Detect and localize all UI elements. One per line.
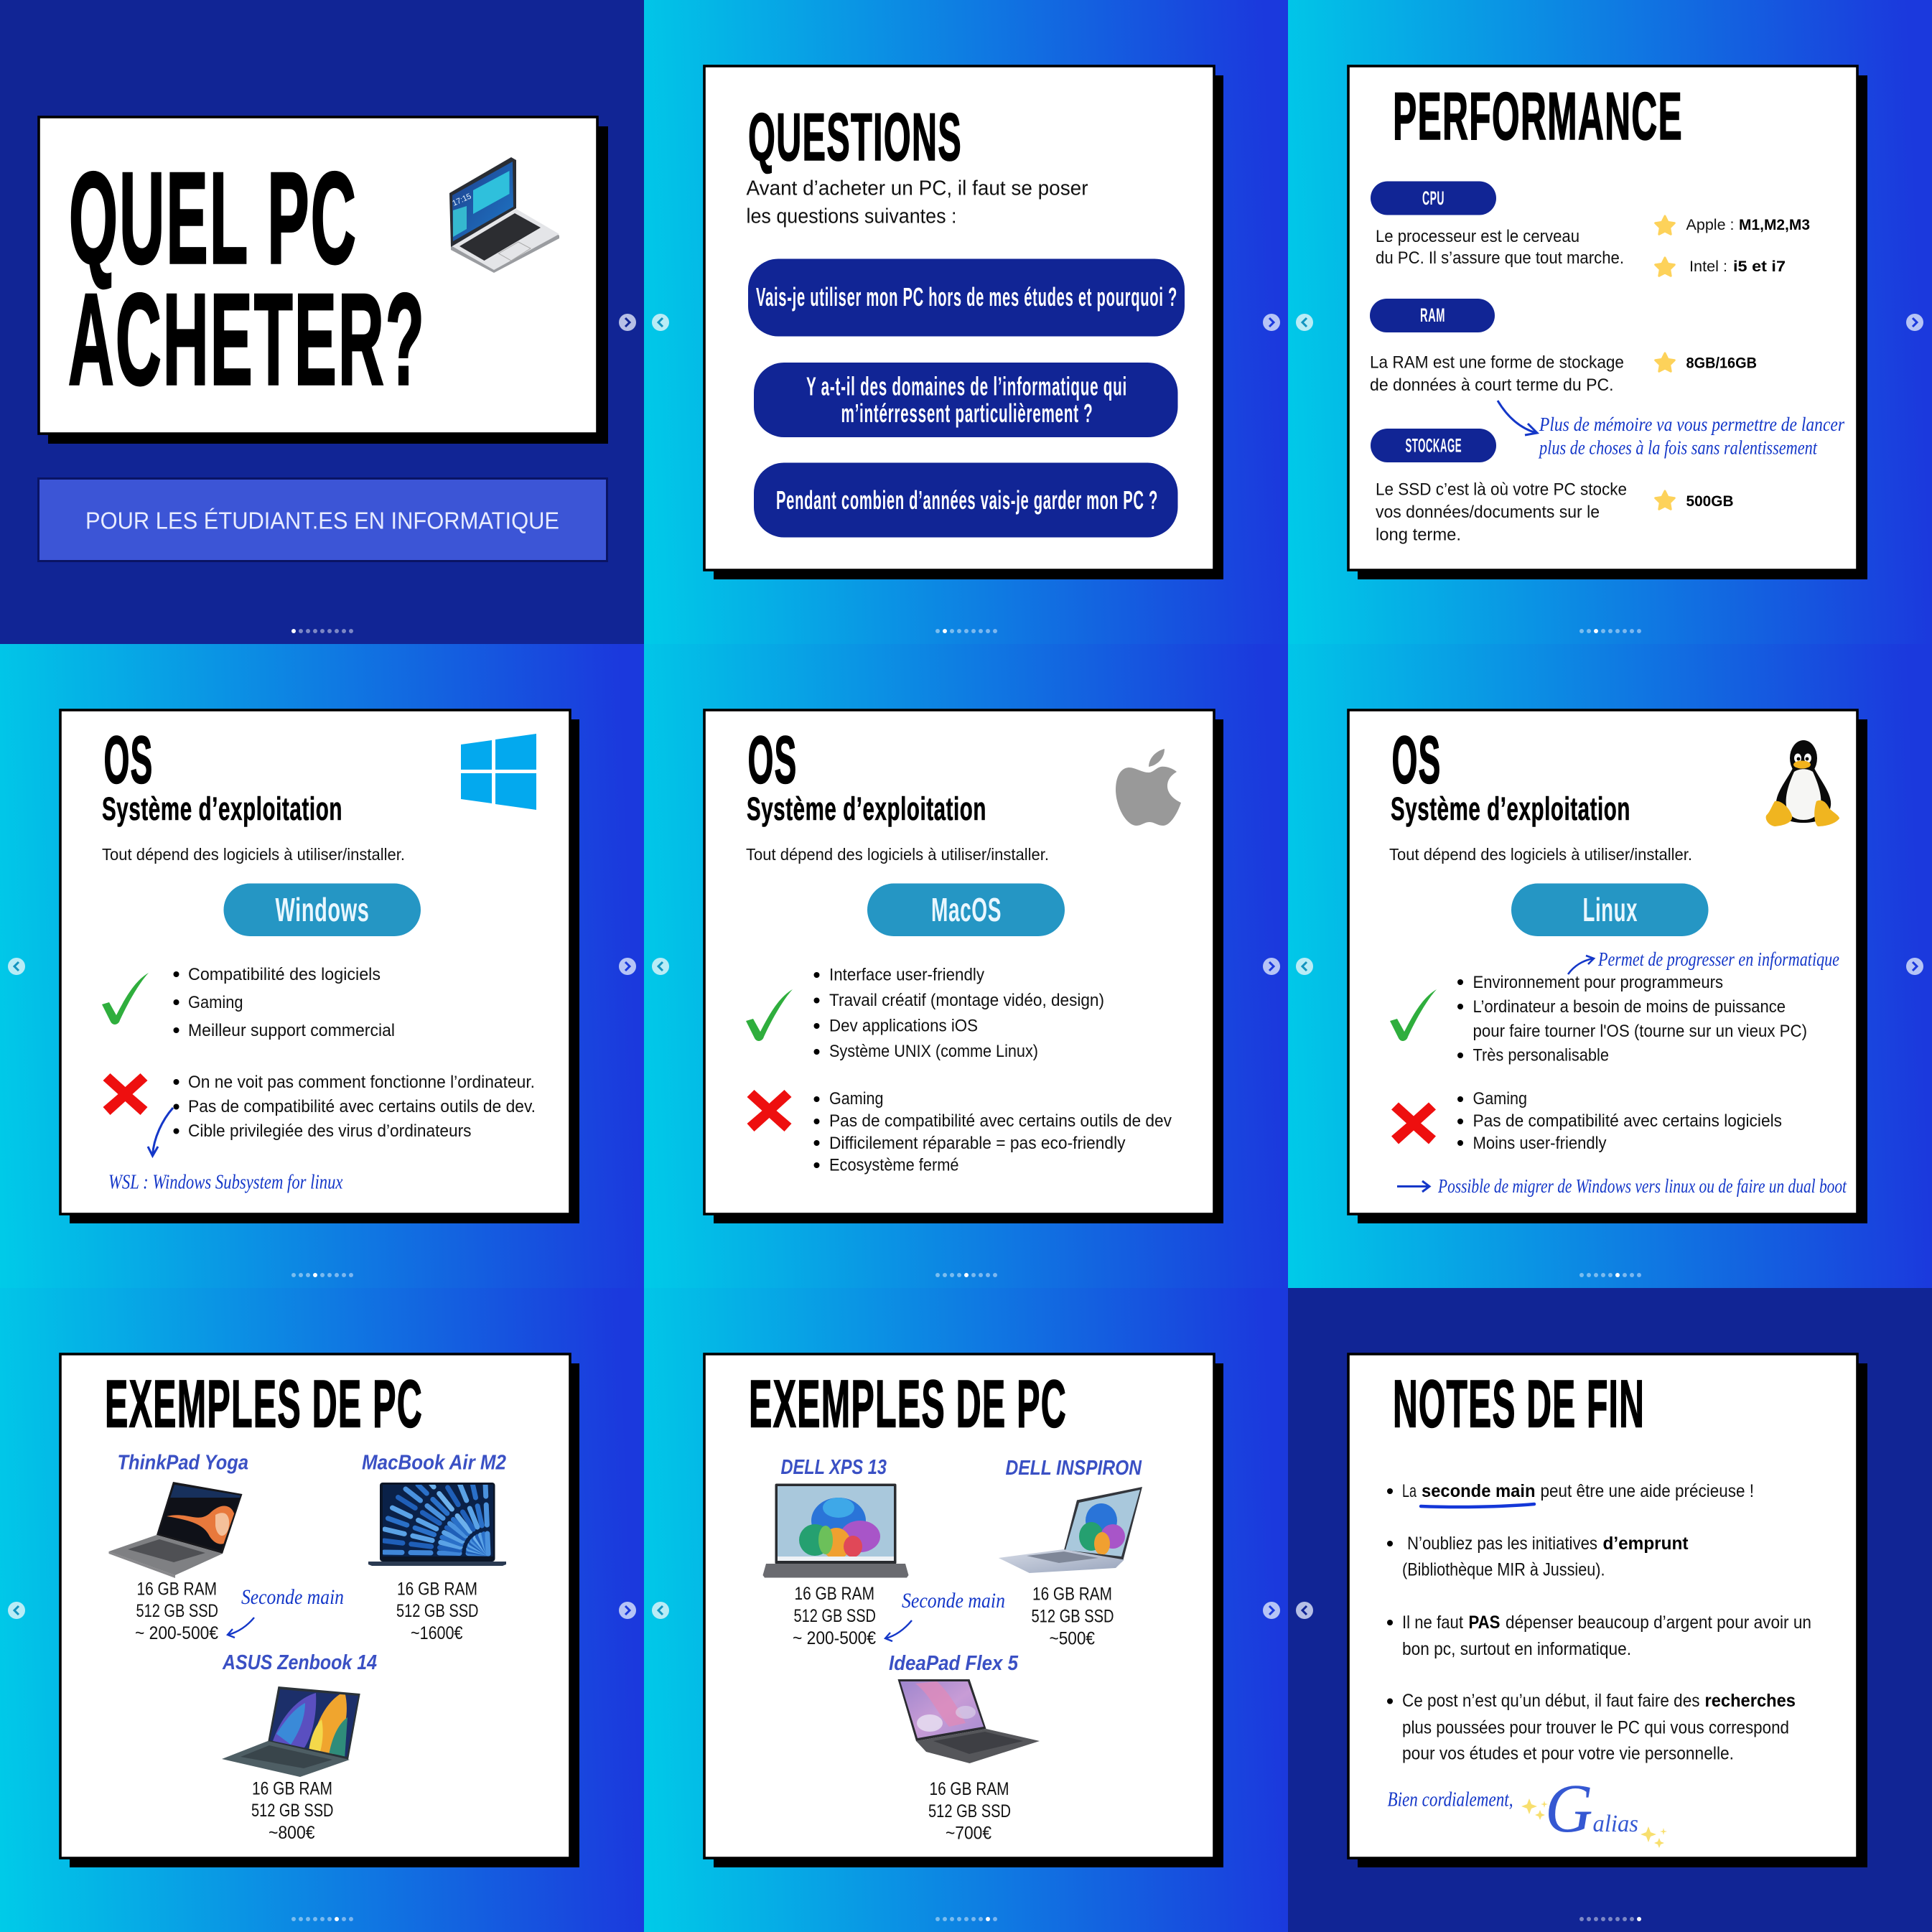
intro line 1: Avant d’acheter un PC, il faut se poser — [747, 177, 1088, 200]
drawbacks list — [174, 1073, 536, 1141]
icon: star — [1656, 353, 1674, 371]
memory note line 2: plus de choses à la fois sans ralentissement — [1538, 437, 1818, 458]
icon: star — [1656, 258, 1674, 276]
card — [704, 710, 1214, 1214]
icon: red cross — [747, 1090, 791, 1131]
note 4 — [1387, 1691, 1796, 1763]
laptop: MacBook — [368, 1483, 506, 1566]
arrow to price — [885, 1620, 912, 1641]
previous arrow — [1296, 314, 1313, 331]
panel: questions — [644, 0, 1288, 644]
note 1: seconde main — [1422, 1481, 1535, 1501]
active dot — [335, 1917, 339, 1921]
previous arrow — [8, 1602, 25, 1619]
specs: ThinkPad — [135, 1579, 218, 1643]
advantages list: pour faire tourner l'OS (tourne sur un vieux PC) — [1473, 1022, 1807, 1041]
next arrow — [1263, 958, 1280, 975]
panel: OS Windows — [0, 644, 644, 1288]
pagination dots — [1579, 1917, 1634, 1921]
card — [1348, 66, 1857, 570]
drawbacks list: Gaming — [1473, 1089, 1527, 1109]
panel: OS MacOS — [644, 644, 1288, 1288]
intro line 2: les questions suivantes : — [747, 205, 956, 228]
next arrow — [1906, 958, 1923, 975]
note 3 — [1387, 1613, 1811, 1659]
specs: MacBook: 512 GB SSD — [396, 1601, 478, 1621]
card shadow — [714, 75, 1223, 579]
model name: ASUS Zenbook 14: ASUS Zenbook 14 — [222, 1651, 377, 1674]
question pill 2 — [754, 363, 1177, 437]
drawbacks list: Pas de compatibilité avec certains outils de dev — [829, 1111, 1172, 1131]
advantages list — [814, 965, 1104, 1061]
advantages list — [174, 965, 395, 1040]
previous arrow — [652, 958, 669, 975]
CPU label: CPU — [1422, 187, 1445, 209]
pagination dots — [1579, 1273, 1641, 1277]
RAM value: 8GB/16GB — [1686, 355, 1757, 372]
active dot — [1637, 1917, 1641, 1921]
active dot — [1615, 1273, 1620, 1277]
panel: OS MacOS: OS — [748, 722, 797, 797]
pagination dots — [291, 1273, 353, 1277]
advantages list: L’ordinateur a besoin de moins de puissance — [1473, 997, 1786, 1017]
drawbacks list — [1457, 1089, 1782, 1153]
specs: DELL XPS: ~ 200-500€ — [793, 1628, 876, 1648]
icon: star — [1656, 216, 1674, 234]
question pill 1 — [748, 258, 1185, 336]
advantages list: Travail créatif (montage vidéo, design) — [829, 991, 1104, 1010]
specs: IdeaPad — [928, 1779, 1011, 1844]
specs: MacBook: ~1600€ — [411, 1623, 463, 1643]
advantages list: Interface user-friendly — [829, 965, 984, 985]
specs: ASUS: ~800€ — [269, 1823, 315, 1843]
closing note: Bien cordialement, — [1387, 1789, 1513, 1811]
drawbacks list: Moins user-friendly — [1473, 1134, 1607, 1153]
note 2: N’oubliez pas les initiatives — [1407, 1534, 1597, 1554]
model name: MacBook Air M2: MacBook Air M2 — [362, 1452, 506, 1475]
heading: PERFORMANCE — [1393, 78, 1683, 154]
subheading: Système d’exploitation — [747, 790, 986, 827]
card — [1348, 710, 1857, 1214]
RAM label: RAM — [1420, 304, 1445, 326]
card — [704, 1354, 1214, 1858]
question 1 text: Vais-je utiliser mon PC hors de mes études et pourquoi ? — [756, 282, 1177, 312]
note 2: d’emprunt — [1602, 1534, 1689, 1554]
previous arrow — [1296, 958, 1313, 975]
model name: DELL INSPIRON: DELL INSPIRON — [1005, 1457, 1142, 1480]
OS name: Linux — [1582, 891, 1638, 928]
previous arrow — [8, 958, 25, 975]
active dot — [964, 1273, 969, 1277]
previous arrow — [1296, 1602, 1313, 1619]
question 2 text line 2: m’intérressent particulièrement ? — [841, 398, 1093, 428]
next arrow — [1263, 1602, 1280, 1619]
specs: MacBook: 16 GB RAM — [397, 1579, 477, 1600]
SSD text line 1: Le SSD c’est là où votre PC stocke — [1376, 480, 1627, 500]
card shadow — [70, 719, 579, 1223]
advantages list: Dev applications iOS — [829, 1017, 978, 1035]
card shadow — [70, 1363, 579, 1867]
question pill 3 — [754, 462, 1177, 537]
heading: EXEMPLES DE PC — [105, 1366, 423, 1442]
previous arrow — [652, 1602, 669, 1619]
pagination dots — [291, 1917, 353, 1921]
panel: PC examples 1 — [0, 1288, 644, 1932]
pagination dots — [1579, 629, 1641, 633]
memory note line 1: Plus de mémoire va vous permettre de lancer — [1539, 414, 1844, 435]
SSD text line 3: long terme. — [1376, 526, 1461, 544]
note 4: recherches — [1704, 1691, 1796, 1711]
Apple label: Apple : — [1686, 217, 1735, 233]
specs: DELL XPS — [793, 1584, 876, 1648]
OS pill — [1511, 883, 1709, 936]
icon: Tux penguin — [1766, 740, 1839, 826]
advantages list: Système UNIX (comme Linux) — [829, 1042, 1038, 1061]
drawbacks list: Pas de compatibilité avec certains logiciels — [1473, 1111, 1782, 1131]
specs: ThinkPad: ~ 200-500€ — [135, 1623, 218, 1643]
arrow to note — [1568, 956, 1594, 974]
icon: Windows logo — [461, 734, 536, 810]
card shadow — [48, 126, 608, 444]
Intel label: Intel : — [1689, 258, 1727, 275]
arrow to price — [228, 1618, 254, 1638]
laptop: DELL XPS — [762, 1483, 909, 1578]
WSL note: WSL : Windows Subsystem for linux — [108, 1172, 343, 1193]
underline stroke — [1421, 1504, 1534, 1507]
intro text: Tout dépend des logiciels à utiliser/installer. — [1389, 845, 1692, 864]
RAM pill — [1370, 299, 1495, 332]
drawbacks list: Gaming — [829, 1089, 883, 1109]
icon: check mark — [1390, 989, 1437, 1041]
drawbacks list: Ecosystème fermé — [829, 1156, 959, 1175]
specs: DELL XPS: 16 GB RAM — [794, 1584, 874, 1604]
specs: MacBook — [396, 1579, 478, 1643]
SSD text line 2: vos données/documents sur le — [1376, 503, 1600, 522]
drawbacks list: Cible privilegiée des virus d’ordinateurs — [188, 1121, 471, 1141]
advantages list: Compatibilité des logiciels — [188, 965, 381, 984]
card shadow — [1358, 1363, 1867, 1867]
arrow to migration note — [1397, 1181, 1429, 1192]
signature: Galias — [1545, 1770, 1638, 1847]
note 2 — [1387, 1534, 1689, 1579]
icon: check mark — [746, 989, 793, 1041]
advantages list: Meilleur support commercial — [188, 1021, 395, 1040]
active dot — [986, 1917, 990, 1921]
icon: check mark — [102, 973, 149, 1025]
card shadow — [1358, 719, 1867, 1223]
OS pill — [224, 883, 421, 936]
next arrow — [1906, 314, 1923, 331]
note 1: La — [1402, 1481, 1417, 1501]
note: progress: Permet de progresser en informatique — [1597, 948, 1839, 970]
specs: ASUS — [251, 1779, 333, 1843]
CPU text line 2: du PC. Il s’assure que tout marche. — [1376, 248, 1624, 268]
note 3: Il ne faut — [1402, 1613, 1463, 1633]
panel: performance — [1288, 0, 1932, 644]
SSD value: 500GB — [1686, 493, 1733, 510]
advantages list: Environnement pour programmeurs — [1473, 973, 1723, 992]
specs: ASUS: 512 GB SSD — [251, 1801, 333, 1821]
panel: OS Windows: OS — [103, 722, 154, 797]
subtitle text: POUR LES ÉTUDIANT.ES EN INFORMATIQUE — [85, 507, 559, 534]
note 4: plus poussées pour trouver le PC qui vous correspond — [1402, 1717, 1789, 1737]
heading: QUESTIONS — [748, 99, 962, 174]
specs: DELL Inspiron: ~500€ — [1050, 1628, 1095, 1648]
note 4: Ce post n’est qu’un début, il faut faire des — [1402, 1691, 1700, 1711]
OS name: Windows — [276, 891, 369, 928]
next arrow — [619, 314, 636, 331]
Intel chips: i5 et i7 — [1733, 258, 1786, 275]
RAM text line 1: La RAM est une forme de stockage — [1370, 353, 1624, 372]
note 1: peut être une aide précieuse ! — [1541, 1481, 1754, 1501]
note 3: dépenser beaucoup d’argent pour avoir un — [1506, 1613, 1811, 1633]
panel: title slide — [0, 0, 644, 644]
note 3: PAS — [1469, 1613, 1501, 1633]
panel: title slide: ACHETER? — [68, 267, 426, 412]
specs: IdeaPad: 512 GB SSD — [928, 1801, 1011, 1821]
model name: ThinkPad Yoga: ThinkPad Yoga — [118, 1452, 248, 1475]
card — [60, 1354, 570, 1858]
laptop: ThinkPad — [109, 1479, 244, 1578]
pagination dots — [935, 1917, 997, 1921]
CPU text line 1: Le processeur est le cerveau — [1376, 227, 1579, 246]
note: second hand: Seconde main — [902, 1589, 1005, 1613]
panel: performance: STOCKAGE — [1406, 435, 1462, 457]
model name: IdeaPad Flex 5: IdeaPad Flex 5 — [889, 1652, 1019, 1675]
pagination dots — [299, 629, 353, 633]
heading: NOTES DE FIN — [1393, 1366, 1645, 1442]
advantages list — [1457, 973, 1807, 1065]
note: second hand: Seconde main — [241, 1585, 344, 1609]
subheading: Système d’exploitation — [1391, 790, 1630, 827]
note 4: pour vos études et pour votre vie personnelle. — [1402, 1743, 1734, 1763]
title card — [39, 117, 597, 434]
drawbacks list: Difficilement réparable = pas eco-friendly — [829, 1134, 1126, 1153]
RAM text line 2: de données à court terme du PC. — [1370, 375, 1614, 395]
card — [60, 710, 570, 1214]
heading: EXEMPLES DE PC — [749, 1366, 1067, 1442]
intro text: Tout dépend des logiciels à utiliser/installer. — [746, 845, 1049, 864]
specs: DELL Inspiron: 16 GB RAM — [1032, 1584, 1112, 1604]
question 3 text: Pendant combien d’années vais-je garder mon PC ? — [776, 485, 1158, 515]
specs: IdeaPad: ~700€ — [946, 1824, 991, 1844]
drawbacks list: Pas de compatibilité avec certains outils de dev. — [188, 1097, 536, 1116]
icon: laptop: 17:15 — [451, 192, 472, 208]
laptop: IdeaPad — [897, 1679, 1040, 1763]
question 2 text line 1: Y a-t-il des domaines de l’informatique qui — [806, 372, 1127, 401]
card shadow — [1358, 75, 1867, 579]
model name: DELL XPS 13: DELL XPS 13 — [781, 1456, 887, 1479]
next arrow — [619, 1602, 636, 1619]
icon: red cross — [103, 1073, 148, 1115]
OS pill — [867, 883, 1065, 936]
previous arrow — [652, 314, 669, 331]
note 3: bon pc, surtout en informatique. — [1402, 1639, 1631, 1659]
specs: IdeaPad: 16 GB RAM — [929, 1779, 1009, 1799]
Apple chips: M1,M2,M3 — [1739, 217, 1810, 233]
card shadow — [714, 719, 1223, 1223]
panel: PC examples 2 — [644, 1288, 1288, 1932]
specs: ThinkPad: 16 GB RAM — [136, 1579, 217, 1600]
arrow to memory note — [1498, 401, 1537, 435]
specs: ThinkPad: 512 GB SSD — [136, 1601, 218, 1621]
advantages list: Gaming — [188, 993, 243, 1012]
CPU pill — [1371, 181, 1496, 215]
arrow to WSL note — [148, 1108, 173, 1156]
pagination dots — [935, 629, 997, 633]
laptop: ASUS — [222, 1684, 363, 1777]
active dot — [1594, 629, 1598, 633]
panel: OS Linux: OS — [1391, 722, 1442, 797]
panel: title slide: QUEL PC — [69, 146, 358, 291]
intro text: Tout dépend des logiciels à utiliser/installer. — [102, 845, 405, 864]
specs: DELL Inspiron: 512 GB SSD — [1031, 1607, 1114, 1627]
specs: ASUS: 16 GB RAM — [252, 1779, 332, 1799]
icon: Apple logo — [1116, 749, 1181, 826]
panel: OS Linux — [1288, 644, 1932, 1288]
pagination dots — [935, 1273, 997, 1277]
note 1 — [1387, 1481, 1754, 1501]
subheading: Système d’exploitation — [102, 790, 342, 827]
advantages list: Très personalisable — [1473, 1045, 1609, 1065]
next arrow — [1263, 314, 1280, 331]
subtitle banner — [39, 478, 607, 561]
next arrow — [619, 958, 636, 975]
sparkles — [1521, 1798, 1667, 1848]
card — [704, 66, 1214, 570]
active dot — [943, 629, 947, 633]
OS name: MacOS — [931, 891, 1002, 928]
active dot — [313, 1273, 317, 1277]
specs: DELL Inspiron — [1031, 1584, 1114, 1648]
card shadow — [714, 1363, 1223, 1867]
icon: red cross — [1391, 1103, 1436, 1144]
laptop: DELL Inspiron — [999, 1486, 1143, 1573]
icon: laptop — [449, 157, 559, 273]
panel: closing notes — [1288, 1288, 1932, 1932]
card — [1348, 1354, 1857, 1858]
active dot — [291, 629, 296, 633]
drawbacks list — [814, 1089, 1172, 1175]
note 2: (Bibliothèque MIR à Jussieu). — [1402, 1559, 1605, 1579]
icon: star — [1656, 491, 1674, 509]
specs: DELL XPS: 512 GB SSD — [794, 1606, 876, 1626]
STOCKAGE pill — [1371, 429, 1496, 462]
drawbacks list: On ne voit pas comment fonctionne l’ordinateur. — [188, 1073, 535, 1092]
